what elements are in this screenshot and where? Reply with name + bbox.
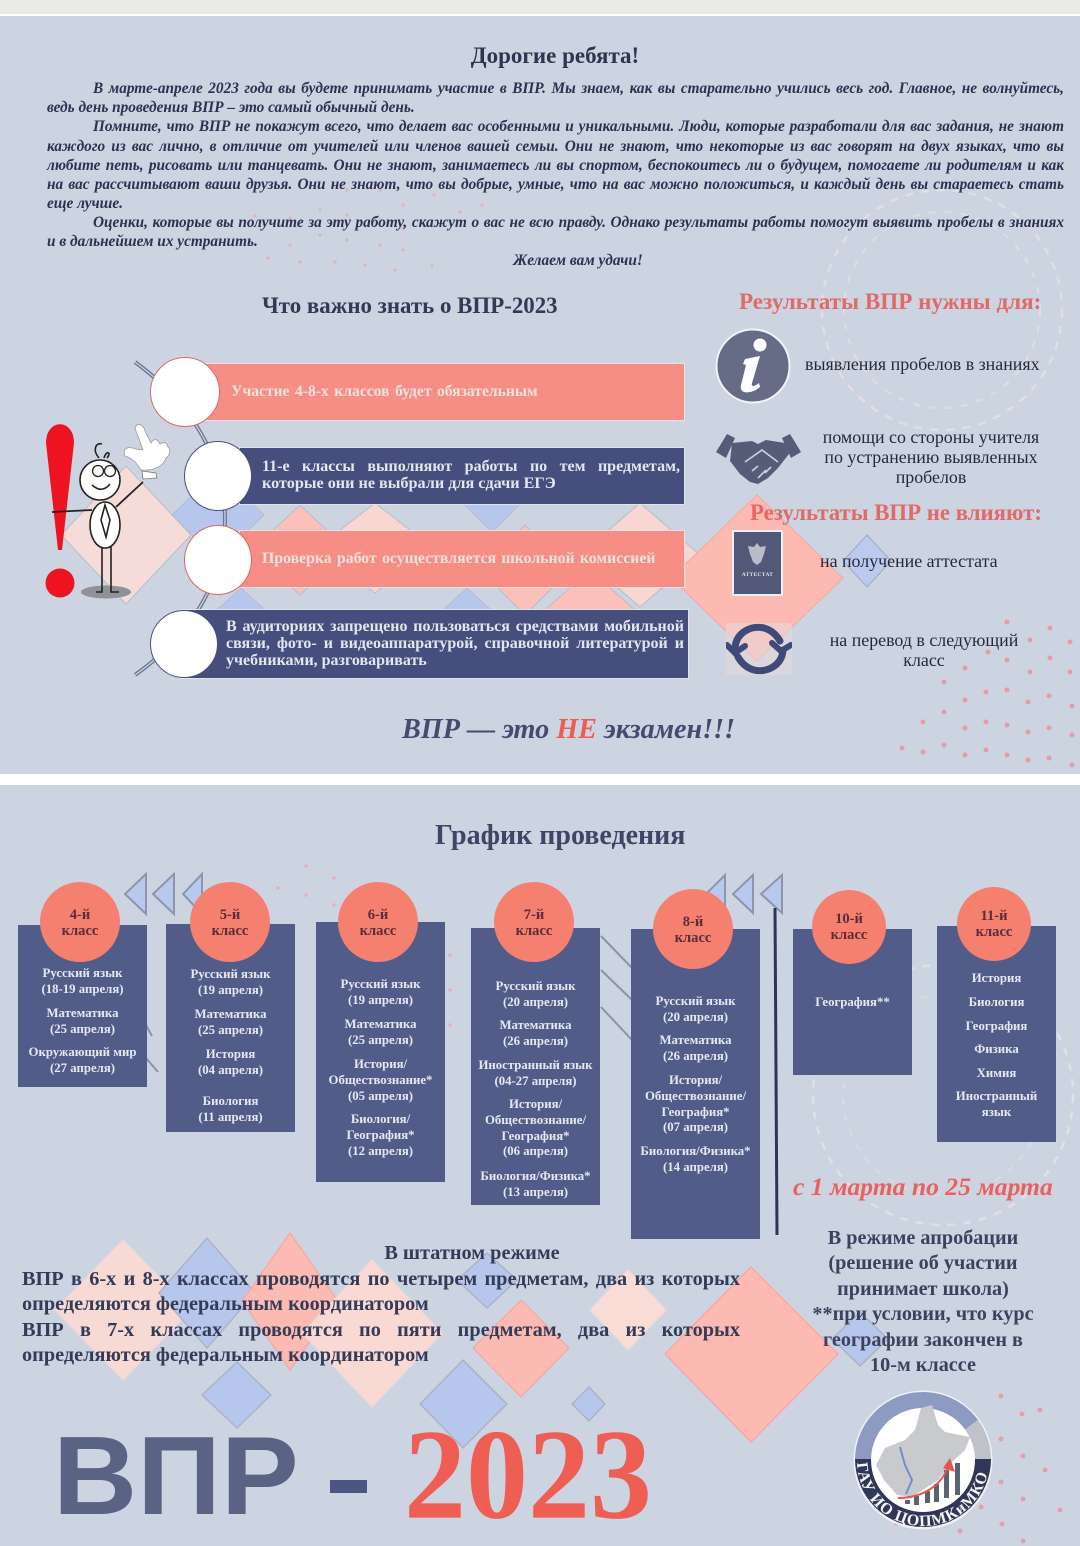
panel: grade 6: (25 апреля) bbox=[348, 1033, 413, 1047]
panel: grade 4: Окружающий мир bbox=[29, 1045, 136, 1059]
panel: fact 4: В аудиториях запрещено пользоваться средствами мобильной bbox=[226, 618, 684, 635]
panel: grade 5: 5-й bbox=[220, 907, 240, 923]
text: teacher help: пробелов bbox=[896, 467, 966, 487]
text block: letter to students: Оценки, которые вы получите за эту работу, скажут о вас не всю правду. Однако результаты работы помогут выявить пробелы в знаниях bbox=[93, 214, 1064, 231]
panel: grade 11: История bbox=[972, 971, 1021, 985]
panel: grade 11: Физика bbox=[974, 1042, 1019, 1056]
text block: pilot mode note: (решение об участии bbox=[828, 1252, 1018, 1274]
icon: exclamation mark and cartoon man bbox=[46, 424, 170, 598]
callout: not an exam: ВПР — это НЕ экзамен!!! bbox=[402, 714, 735, 745]
panel: grade 7: класс bbox=[516, 923, 552, 939]
panel: fact 4: связи, фото- и видеоаппаратурой, справочной литературой и bbox=[226, 635, 684, 652]
panel: grade 8: Русский язык bbox=[656, 994, 735, 1008]
panel: fact 4: учебниками, разговаривать bbox=[226, 652, 427, 669]
panel: grade 11: География bbox=[966, 1019, 1027, 1033]
icon: refresh arrows bbox=[726, 623, 792, 675]
panel: grade 8: 8-й bbox=[683, 914, 703, 930]
heading: what to know: Что важно знать о ВПР-2023 bbox=[262, 293, 558, 318]
title: VPR 2023 wordmark bbox=[53, 1403, 652, 1546]
panel: fact 4 bbox=[150, 609, 689, 679]
text block: standard mode: ВПР в 6-х и 8-х классах проводятся по четырем предметам, два из которых bbox=[22, 1268, 740, 1290]
panel: fact 1 bbox=[150, 357, 685, 427]
text block: letter to students: Желаем вам удачи! bbox=[513, 252, 643, 269]
panel: grade 10: 10-й bbox=[835, 911, 863, 927]
panel: grade 11: 11-й bbox=[980, 908, 1008, 924]
panel: grade 4: класс bbox=[62, 923, 98, 939]
panel: grade 6: 6-й bbox=[368, 907, 388, 923]
icon: organization logo: ГАУ ИО ЦОПМКиМКО bbox=[856, 1462, 986, 1527]
panel: grade 6: География* bbox=[346, 1128, 415, 1142]
panel: grade 7 bbox=[471, 882, 600, 1205]
panel: grade 7: История/ bbox=[509, 1097, 562, 1111]
icon: info bbox=[716, 328, 790, 404]
panel: grade 6: Биология/ bbox=[351, 1112, 410, 1126]
panel: grade 8: (26 апреля) bbox=[663, 1049, 728, 1063]
panel: grade 4 bbox=[18, 882, 147, 1087]
panel: grade 11: класс bbox=[976, 924, 1012, 940]
panel: grade 6: История/ bbox=[354, 1057, 407, 1071]
panel: fact 3: Проверка работ осуществляется школьной комиссией bbox=[262, 550, 655, 567]
text block: pilot mode note: 10-м классе bbox=[870, 1354, 976, 1376]
panel: grade 4: 4-й bbox=[70, 907, 90, 923]
panel: letter and facts background bbox=[0, 16, 1080, 774]
text block: pilot mode note bbox=[812, 1227, 1034, 1376]
panel: grade 4: (25 апреля) bbox=[50, 1022, 115, 1036]
panel: grade 8: Обществознание/ bbox=[645, 1089, 746, 1103]
panel: grade 5: (11 апреля) bbox=[198, 1110, 263, 1124]
text block: letter to students: Помните, что ВПР не покажут всего, что делает вас особенными и уникальными. Люди, которые разработали для вас задания, не знают bbox=[93, 118, 1064, 135]
text block: letter to students: и в дальнейшем их устранить. bbox=[47, 233, 258, 250]
text block: pilot mode note: В режиме апробации bbox=[828, 1227, 1018, 1249]
top browser strip bbox=[0, 0, 1080, 14]
panel: grade 7: 7-й bbox=[524, 907, 544, 923]
callout: march dates: с 1 марта по 25 марта bbox=[793, 1172, 1053, 1201]
panel: grade 6: Русский язык bbox=[341, 977, 420, 991]
text block: letter to students: каждого из вас лично, в отличие от учителей или членов вашей семьи. Они не знают, что некоторые из вас говорят на двух языках, что вы bbox=[47, 138, 1064, 155]
heading: results needed for: Результаты ВПР нужны для: bbox=[739, 288, 1041, 314]
title: schedule: График проведения bbox=[435, 820, 685, 851]
panel: grade 7: (06 апреля) bbox=[503, 1144, 568, 1158]
text block: letter to students: ведь день проведения ВПР – это самый обычный день. bbox=[47, 99, 415, 116]
panel: grade 5: История bbox=[206, 1047, 255, 1061]
text block: letter to students: В марте-апреле 2023 года вы будете принимать участие в ВПР. Мы знаем, как вы старательно учились весь год. Главное, не волнуйтесь, bbox=[93, 80, 1064, 97]
panel: schedule background bbox=[0, 785, 1080, 1546]
panel: grade 6: Обществознание* bbox=[329, 1073, 432, 1087]
panel: grade 7: Иностранный язык bbox=[478, 1058, 593, 1072]
panel: grade 7: (13 апреля) bbox=[503, 1185, 568, 1199]
text block: letter to students: на вас рассчитывают ваши друзья. Они не знают, что вы добрые, умные, что на вас можно положиться, и каждый день вы стараетесь стать bbox=[47, 176, 1064, 193]
heading: results do not affect: Результаты ВПР не влияют: bbox=[750, 500, 1042, 525]
text block: standard mode: определяются федеральным координатором bbox=[22, 1293, 429, 1315]
panel: grade 8: (07 апреля) bbox=[663, 1120, 728, 1134]
panel: grade 8: (14 апреля) bbox=[663, 1160, 728, 1174]
panel: fact 3 bbox=[184, 525, 685, 595]
panel: grade 8: класс bbox=[675, 930, 711, 946]
panel: grade 8: История/ bbox=[669, 1073, 722, 1087]
panel: grade 5: Математика bbox=[194, 1007, 267, 1021]
panel: grade 4: (18-19 апреля) bbox=[41, 982, 124, 996]
panel: grade 6 bbox=[316, 882, 445, 1182]
icon: organization logo bbox=[854, 1390, 992, 1530]
text block: pilot mode note: географии закончен в bbox=[823, 1329, 1023, 1351]
panel: grade 6: Математика bbox=[344, 1017, 417, 1031]
icon: attestat certificate: АТТЕСТАТ bbox=[742, 572, 773, 578]
panel: grade 5: Биология bbox=[203, 1094, 258, 1108]
text block: standard mode: В штатном режиме bbox=[384, 1242, 560, 1264]
panel: grade 7: География* bbox=[501, 1129, 570, 1143]
text: next grade bbox=[830, 630, 1018, 670]
panel: grade 11: язык bbox=[982, 1105, 1011, 1119]
title: dear children: Дорогие ребята! bbox=[471, 43, 639, 68]
panel: grade 10: География** bbox=[815, 995, 890, 1009]
panel: grade 10: класс bbox=[831, 927, 867, 943]
panel: grade 6: (19 апреля) bbox=[348, 993, 413, 1007]
panel: grade 6: класс bbox=[360, 923, 396, 939]
panel: grade 8 bbox=[631, 889, 760, 1239]
panel: grade 8: Биология/Физика* bbox=[640, 1144, 751, 1158]
panel: grade 7: (26 апреля) bbox=[503, 1034, 568, 1048]
panel: grade 11 bbox=[937, 887, 1056, 1142]
title: VPR 2023 wordmark: 2023 bbox=[404, 1403, 652, 1546]
text: teacher help: помощи со стороны учителя bbox=[823, 427, 1039, 447]
panel: grade 7: Биология/Физика* bbox=[480, 1169, 591, 1183]
panel: grade 5: класс bbox=[212, 923, 248, 939]
text: reveal gaps in knowledge: выявления пробелов в знаниях bbox=[805, 354, 1040, 374]
panel: grade 8: (20 апреля) bbox=[663, 1010, 728, 1024]
text block: letter to students bbox=[46, 80, 1064, 269]
panel: grade 7: Математика bbox=[499, 1018, 572, 1032]
panel: grade 5: (04 апреля) bbox=[198, 1063, 263, 1077]
text block: standard mode: определяются федеральным координатором bbox=[22, 1344, 429, 1366]
panel: grade 11: Биология bbox=[969, 995, 1024, 1009]
text block: letter to students: любите петь, рисовать или танцевать. Они не знают, занимаетесь ли вы спортом, беспокоитесь ли о будущем, помогаете ли родителям и как bbox=[47, 157, 1064, 174]
panel: grade 10 bbox=[793, 890, 912, 1075]
panel: grade 4: Математика bbox=[46, 1006, 119, 1020]
text block: standard mode: ВПР в 7-х классах проводятся по пяти предметам, два из которых bbox=[22, 1319, 740, 1341]
text block: standard mode bbox=[22, 1242, 740, 1366]
panel: grade 7: Русский язык bbox=[496, 979, 575, 993]
text block: pilot mode note: **при условии, что курс bbox=[812, 1303, 1034, 1325]
panel: grade 7: (20 апреля) bbox=[503, 995, 568, 1009]
panel: grade 4: Русский язык bbox=[43, 966, 122, 980]
title: VPR 2023 wordmark: ВПР bbox=[53, 1414, 299, 1538]
panel: grade 11: Химия bbox=[977, 1066, 1016, 1080]
text: next grade: на перевод в следующий bbox=[830, 630, 1018, 650]
panel: fact 1: Участие 4-8-х классов будет обязательным bbox=[231, 383, 538, 400]
panel: grade 11: Иностранный bbox=[956, 1089, 1037, 1103]
panel: fact 2: которые они не выбрали для сдачи ЕГЭ bbox=[262, 474, 556, 492]
text block: letter to students: еще лучше. bbox=[47, 195, 123, 212]
panel: grade 4: (27 апреля) bbox=[50, 1061, 115, 1075]
panel: grade 5: (25 апреля) bbox=[198, 1023, 263, 1037]
panel: grade 7: Обществознание/ bbox=[485, 1113, 586, 1127]
panel: grade 6: (05 апреля) bbox=[348, 1089, 413, 1103]
panel: grade 6: (12 апреля) bbox=[348, 1144, 413, 1158]
panel: fact 2 bbox=[184, 441, 685, 511]
text block: pilot mode note: принимает школа) bbox=[837, 1278, 1009, 1300]
panel: grade 8: География* bbox=[661, 1105, 730, 1119]
panel: grade 5 bbox=[166, 882, 295, 1132]
text: next grade: класс bbox=[903, 650, 945, 670]
panel: grade 7: (04-27 апреля) bbox=[494, 1074, 577, 1088]
text: teacher help: по устранению выявленных bbox=[824, 447, 1038, 467]
panel: grade 5: Русский язык bbox=[191, 967, 270, 981]
icon: handshake bbox=[716, 434, 801, 484]
text: getting certificate: на получение аттестата bbox=[820, 551, 998, 571]
panel: fact 2: 11-е классы выполняют работы по тем предметам, bbox=[262, 458, 680, 475]
text: teacher help bbox=[823, 427, 1039, 487]
icon: attestat certificate bbox=[732, 530, 783, 596]
panel: grade 8: Математика bbox=[659, 1033, 732, 1047]
panel: grade 5: (19 апреля) bbox=[198, 983, 263, 997]
